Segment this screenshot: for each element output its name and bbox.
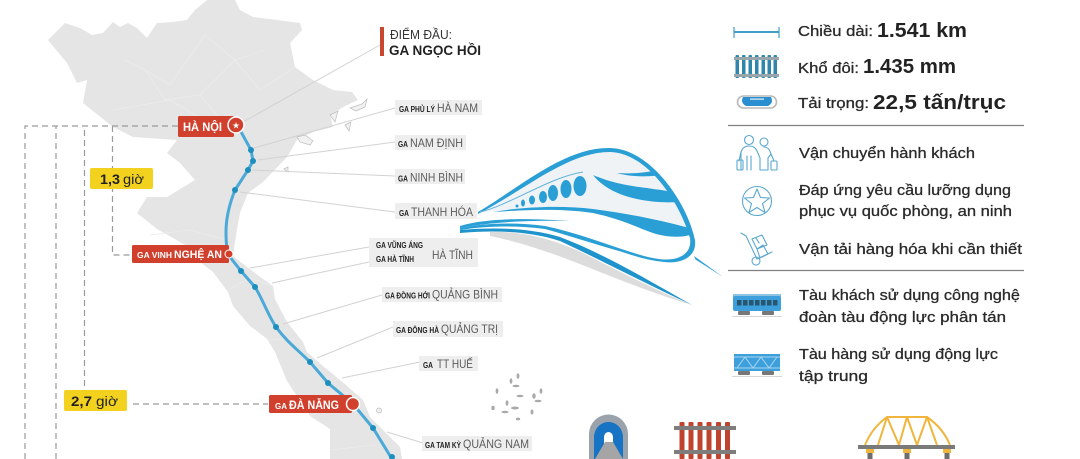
station: Ga TT Huế bbox=[419, 356, 478, 371]
text: freight trains bbox=[799, 346, 999, 385]
station: Ga Thanh Hóa: GA bbox=[399, 209, 409, 218]
text: freight trains: Tàu hàng sử dụng động lực bbox=[799, 346, 999, 363]
label: Ga Vinh Nghệ An: GA VINH bbox=[137, 251, 172, 260]
icon: gauge track bbox=[734, 55, 779, 78]
time badge: 1,3 giờ: giờ bbox=[123, 171, 144, 187]
text: dual-use requirement bbox=[799, 182, 1012, 220]
station: Ga Phủ Lý Hà Nam: HÀ NAM bbox=[437, 100, 478, 115]
time badge: 2,7 giờ: 2,7 bbox=[71, 393, 92, 409]
spec: length: Chiều dài: bbox=[798, 23, 873, 40]
icon: truss bridge bbox=[858, 417, 955, 459]
icon: passengers bbox=[737, 136, 777, 170]
station: Ga Vũng Áng, Ga Hà Tĩnh: GA HÀ TĨNH bbox=[376, 255, 414, 264]
text: passenger transport: Vận chuyển hành khách bbox=[799, 145, 975, 162]
station: Ga TT Huế: TT HUẾ bbox=[437, 356, 473, 371]
spec: axle load: 22,5 tấn/trục bbox=[873, 92, 1006, 114]
station: Ga Phủ Lý Hà Nam: GA PHỦ LÝ bbox=[399, 105, 436, 114]
label: start point Ga Ngọc Hồi: GA NGỌC HỒI bbox=[389, 43, 481, 58]
illustration: high-speed train bbox=[460, 148, 723, 305]
label: Hà Nội: HÀ NỘI bbox=[183, 121, 222, 134]
railway route bbox=[226, 130, 395, 459]
station: Ga Đông Hà Quảng Trị bbox=[393, 321, 503, 337]
station: Ga Ninh Bình bbox=[395, 169, 465, 184]
station: Ga Tam Kỳ Quảng Nam: GA TAM KỲ bbox=[425, 441, 462, 450]
station: Ga Vũng Áng, Ga Hà Tĩnh: HÀ TĨNH bbox=[432, 247, 473, 262]
station: Ga Đồng Hới Quảng Bình: QUẢNG BÌNH bbox=[432, 286, 498, 302]
icon: freight wagon bbox=[732, 354, 782, 377]
text: freight when needed: Vận tải hàng hóa khi cần thiết bbox=[799, 241, 1023, 258]
label: Ga Đà Nẵng bbox=[269, 395, 360, 413]
dashed travel-time guides bbox=[25, 126, 268, 459]
text: passenger trains bbox=[799, 287, 1020, 326]
station: Ga Ninh Bình: GA bbox=[398, 174, 408, 184]
station: Ga Đồng Hới Quảng Bình bbox=[382, 286, 502, 302]
icon: railway track bbox=[674, 422, 736, 459]
time badge: 1,3 giờ bbox=[90, 168, 153, 189]
station: Ga Vũng Áng, Ga Hà Tĩnh: GA VŨNG ÁNG bbox=[376, 241, 423, 250]
station: Ga Thanh Hóa: THANH HÓA bbox=[411, 204, 473, 219]
station: Ga Đông Hà Quảng Trị: GA ĐÔNG HÀ bbox=[396, 326, 439, 335]
spec: length bbox=[798, 20, 967, 42]
time badge: 2,7 giờ bbox=[64, 390, 127, 411]
spec: gauge: Khổ đôi: bbox=[798, 60, 859, 77]
station: Ga Thanh Hóa bbox=[395, 203, 477, 219]
icon: length ruler bbox=[734, 27, 779, 38]
label: Ga Đà Nẵng: ĐÀ NẴNG bbox=[289, 397, 339, 412]
spec: gauge bbox=[798, 56, 956, 78]
label: Hà Nội bbox=[178, 116, 244, 137]
spec: axle load: Tải trọng: bbox=[798, 95, 869, 112]
icon: passenger coach bbox=[732, 294, 782, 317]
station: Ga Đông Hà Quảng Trị: QUẢNG TRỊ bbox=[441, 321, 498, 336]
label: Hà Nội: ★ bbox=[232, 120, 240, 130]
label: start point Ga Ngọc Hồi bbox=[380, 27, 481, 58]
station: Ga Nam Định: GA bbox=[398, 140, 408, 149]
icon: Hoàng Sa islands bbox=[491, 373, 542, 420]
icon: axle load bbox=[738, 96, 776, 108]
station: Ga TT Huế: GA bbox=[423, 361, 433, 370]
label: Ga Vinh Nghệ An bbox=[132, 245, 233, 263]
time badge: 1,3 giờ: 1,3 bbox=[100, 171, 120, 187]
label: start point Ga Ngọc Hồi: ĐIỂM ĐẦU: bbox=[390, 27, 452, 42]
label: Ga Đà Nẵng: GA bbox=[275, 401, 287, 411]
station: Ga Ninh Bình: NINH BÌNH bbox=[410, 170, 463, 184]
time badge: 2,7 giờ: giờ bbox=[96, 393, 118, 409]
spec: axle load bbox=[798, 92, 1006, 114]
text: dual-use requirement: Đáp ứng yêu cầu lưỡng dụng bbox=[799, 182, 1011, 199]
text: passenger trains: Tàu khách sử dụng công nghệ bbox=[799, 287, 1020, 304]
station: Ga Đồng Hới Quảng Bình: GA ĐỒNG HỚI bbox=[385, 290, 430, 300]
station: Ga Nam Định: NAM ĐỊNH bbox=[410, 136, 463, 150]
spec: length: 1.541 km bbox=[877, 20, 967, 42]
station: Ga Phủ Lý Hà Nam bbox=[395, 100, 482, 115]
map of Vietnam bbox=[48, 0, 402, 459]
icon: hand truck with parcels bbox=[741, 233, 772, 265]
station: Ga Tam Kỳ Quảng Nam: QUẢNG NAM bbox=[463, 436, 529, 451]
icon: tunnel bbox=[589, 414, 628, 459]
station: Ga Tam Kỳ Quảng Nam bbox=[422, 436, 532, 451]
text: dual-use requirement: phục vụ quốc phòng, an ninh bbox=[799, 203, 1012, 220]
icon: star for defence bbox=[742, 186, 772, 216]
station: Ga Vũng Áng, Ga Hà Tĩnh bbox=[369, 238, 478, 267]
station leader lines bbox=[240, 45, 423, 443]
text: freight trains: tập trung bbox=[799, 368, 868, 385]
label: Ga Vinh Nghệ An: NGHỆ AN bbox=[174, 248, 222, 261]
text: passenger trains: đoàn tàu động lực phân tán bbox=[799, 309, 1006, 326]
spec: gauge: 1.435 mm bbox=[863, 56, 956, 78]
